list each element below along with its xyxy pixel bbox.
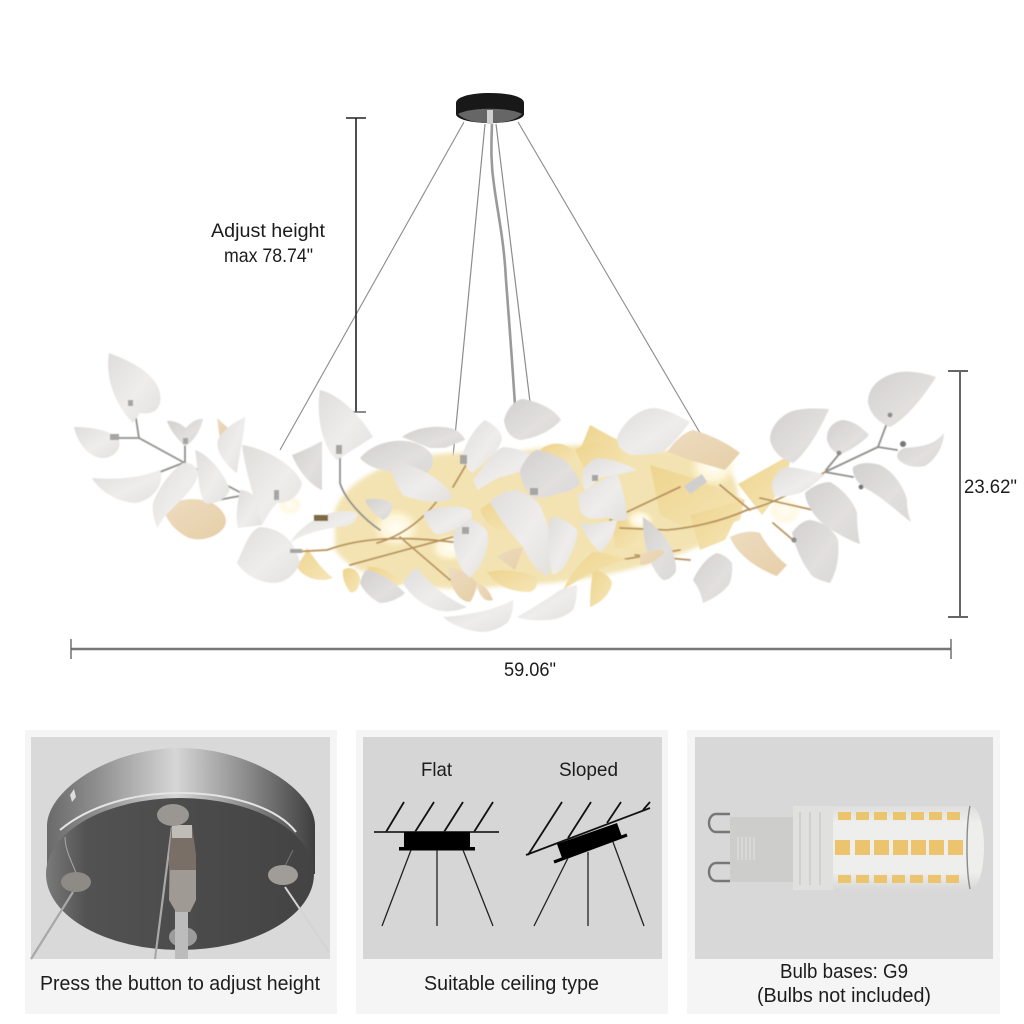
width value: 59.06" [504,660,556,681]
width dimension line [71,639,951,681]
sloped ceiling diagram [526,802,650,926]
central leaves, right half [490,408,740,620]
central leaves, left half [237,390,580,632]
max height label: max 78.74" [224,245,313,267]
flat ceiling diagram [374,802,499,926]
panel: ceiling type [356,730,668,1014]
caption: Press the button to adjust height [40,973,320,995]
caption: Suitable ceiling type [424,973,599,995]
metal clips and sockets [110,400,906,553]
adjust height dimension [211,118,366,412]
panel: adjust button [25,730,337,1014]
right spray leaves [693,372,944,603]
height value: 23.62" [964,477,1017,498]
panel: bulb [687,730,1000,1014]
ceiling canopy [456,93,524,124]
LED rows [835,812,963,883]
G9 bulb [709,806,984,890]
adjust height label: Adjust height [211,220,326,242]
chandelier [74,353,944,632]
caption line one: Bulb bases: G9 [780,961,908,983]
canopy close-up [31,748,329,959]
suspension wires and power cord [280,122,710,457]
branches [115,412,897,580]
height dimension line [948,371,1017,617]
sloped label: Sloped [559,759,618,781]
light glows [278,447,801,562]
caption line two: (Bulbs not included) [757,985,931,1007]
left spray leaves [74,353,264,528]
back tan leaves [165,425,790,607]
flat label: Flat [421,759,453,781]
golden glow mass [335,445,738,589]
